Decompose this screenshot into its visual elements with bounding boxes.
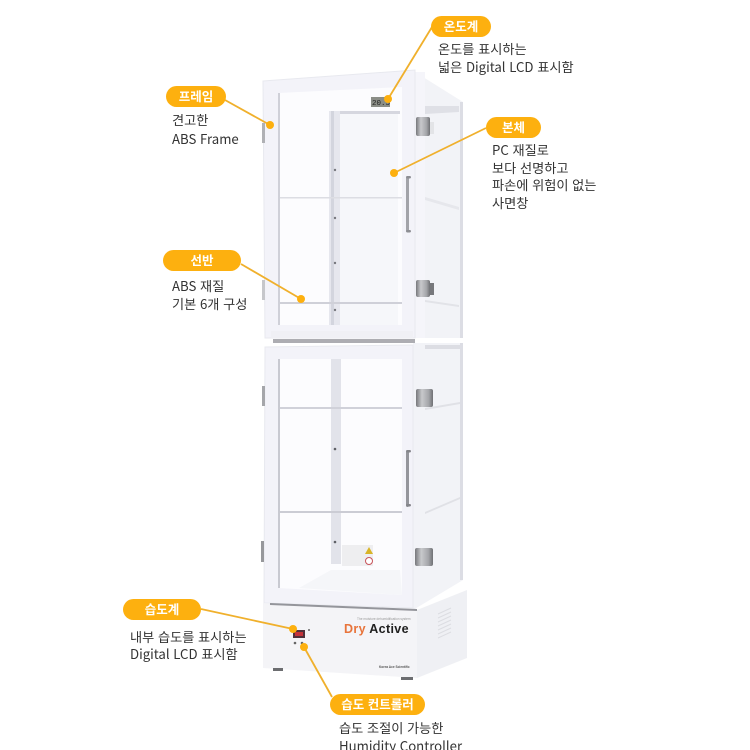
- label: 프레임: 프레임: [179, 86, 213, 105]
- upper cabinet: 20.5: [372, 100, 391, 108]
- upper glass: [278, 87, 402, 325]
- lower shelves: [280, 407, 402, 409]
- line: 습도계: [201, 609, 297, 633]
- line: 선반: [241, 264, 305, 303]
- line: 습도 컨트롤러: [300, 643, 332, 697]
- lower glass: [278, 359, 402, 595]
- lower side panel: [413, 343, 463, 610]
- warning labels: [342, 545, 373, 566]
- text: 본체 description: [492, 140, 596, 212]
- upper shelves: [280, 197, 402, 198]
- text: 선반 description: 기본 6개 구성: [172, 294, 247, 312]
- label: 습도 컨트롤러: 습도 컨트롤러: [341, 694, 414, 713]
- post bolts: [334, 169, 336, 311]
- label: 습도계: [123, 599, 201, 620]
- label: 온도계: [431, 16, 491, 37]
- vents: [438, 608, 451, 638]
- controller base: The moisture dehumidification system: [357, 617, 411, 621]
- brand logo: Dry Active: [344, 622, 409, 636]
- line: 본체: [390, 128, 486, 177]
- line: 프레임: [225, 100, 274, 129]
- label: 습도계: 습도계: [145, 599, 179, 618]
- label: 본체: 본체: [502, 117, 525, 136]
- lower hinges: [416, 389, 433, 407]
- text: 프레임 description: [172, 110, 239, 148]
- controller base: Korea Ace Scientific: [379, 665, 410, 669]
- upper cabinet: [262, 70, 463, 343]
- line: 온도계: [384, 27, 432, 103]
- label: 선반: [163, 250, 241, 271]
- lower handle: [406, 451, 409, 507]
- text: 습도계 description: [130, 626, 247, 663]
- post bolts: [334, 448, 336, 543]
- text: 본체 description: 사면창: [492, 192, 528, 212]
- upper hinges: [416, 117, 430, 136]
- text: 습도계 description: Digital LCD 표시함: [130, 644, 238, 663]
- humidity display: [293, 630, 305, 638]
- text: 본체 description: 파손에 위험이 없는: [492, 175, 596, 194]
- text: 습도계 description: 내부 습도를 표시하는: [130, 626, 247, 646]
- text: 본체 description: 보다 선명하고: [492, 158, 568, 176]
- text: 습도 컨트롤러 description: [339, 718, 462, 750]
- upper handle: [406, 177, 409, 232]
- text: 온도계 description: 온도를 표시하는: [438, 39, 527, 58]
- text: 온도계 description: [438, 39, 574, 76]
- label: 선반: 선반: [190, 250, 214, 269]
- upper side panel: [415, 72, 463, 338]
- text: 선반 description: [172, 276, 247, 312]
- upper door frame: [263, 70, 415, 338]
- label: 습도 컨트롤러: [330, 694, 425, 715]
- text: 온도계 description: 넓은 Digital LCD 표시함: [438, 56, 574, 76]
- text: 습도 컨트롤러 description: 습도 조절이 가능한: [339, 718, 443, 737]
- lower cabinet: [261, 343, 463, 610]
- callout lines and dots: [201, 27, 486, 697]
- label: 본체: [486, 117, 541, 138]
- text: 선반 description: ABS 재질: [172, 276, 224, 295]
- text: 프레임 description: ABS Frame: [172, 128, 239, 148]
- thermometer display: [371, 97, 390, 107]
- controller base: [263, 590, 467, 680]
- text: 프레임 description: 견고한: [172, 110, 208, 129]
- text: 본체 description: PC 재질로: [492, 140, 549, 159]
- label: 온도계: 온도계: [444, 16, 478, 35]
- label: 프레임: [166, 86, 226, 107]
- lower door frame: [264, 345, 413, 608]
